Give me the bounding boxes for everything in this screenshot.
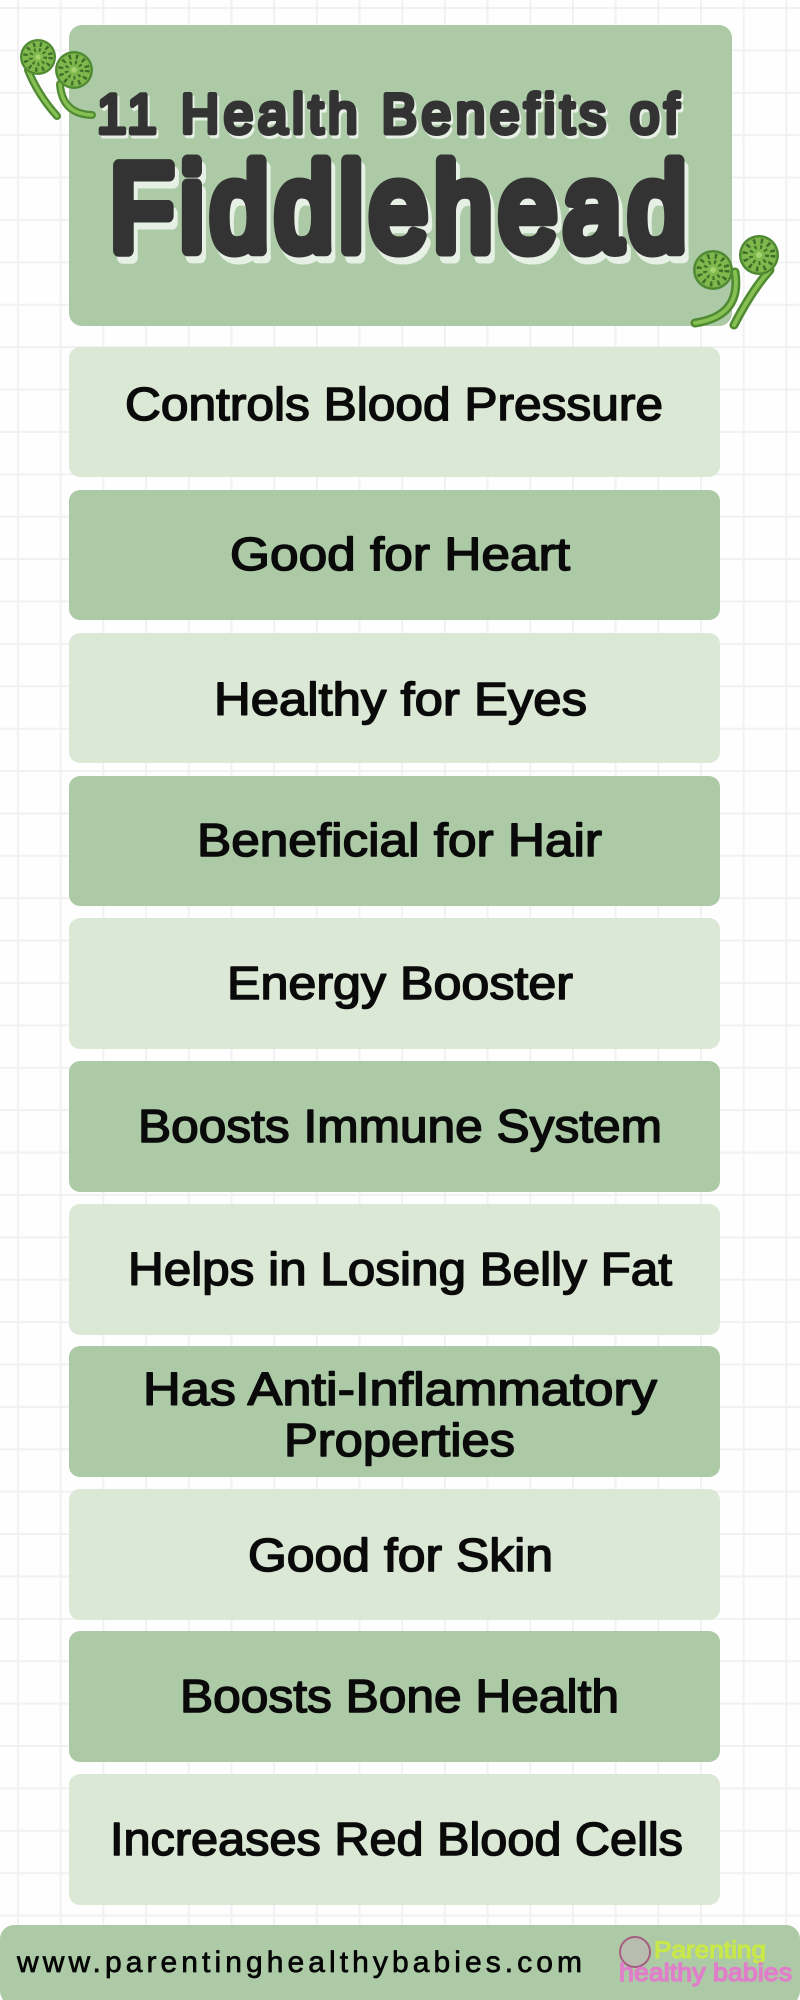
panel: Boosts Bone Health: [69, 1631, 720, 1762]
panel: Good for Skin: Good for Skin: [248, 1529, 553, 1581]
title: Fiddlehead: Fiddlehead: [110, 140, 686, 277]
logo: Parenting healthy babies: Parenting: [654, 1937, 766, 1964]
panel: Helps in Losing Belly Fat: [69, 1204, 720, 1335]
icon: fern quote right: [693, 235, 779, 325]
panel: Boosts Bone Health: Boosts Bone Health: [180, 1670, 619, 1722]
panel: Controls Blood Pressure: [69, 347, 720, 477]
panel: Energy Booster: Energy Booster: [227, 957, 573, 1009]
panel: Beneficial for Hair: [69, 776, 720, 906]
logo: Parenting healthy babies: [619, 1937, 792, 1987]
panel: Healthy for Eyes: Healthy for Eyes: [214, 673, 587, 725]
panel: Healthy for Eyes: [69, 633, 720, 763]
panel: Energy Booster: [69, 918, 720, 1049]
panel: Has Anti-Inflammatory Properties: Properties: [284, 1414, 515, 1466]
panel: Good for Heart: [69, 490, 720, 620]
title: 11 Health Benefits of: 11 Health Benefits of: [99, 86, 682, 148]
panel: Increases Red Blood Cells: [69, 1774, 720, 1905]
panel: Increases Red Blood Cells: Increases Red Blood Cells: [110, 1813, 683, 1865]
panel: Good for Skin: [69, 1489, 720, 1620]
panel: Boosts Immune System: Boosts Immune System: [138, 1100, 662, 1152]
icon: fern quote left: [20, 39, 93, 116]
panel: Boosts Immune System: [69, 1061, 720, 1192]
logo: Parenting healthy babies: healthy babies: [619, 1959, 792, 1987]
panel: Has Anti-Inflammatory Properties: Has Anti-Inflammatory: [143, 1363, 657, 1415]
panel: header: [69, 25, 732, 326]
panel: Good for Heart: Good for Heart: [230, 528, 570, 580]
panel: Beneficial for Hair: Beneficial for Hair: [197, 814, 602, 866]
panel: Has Anti-Inflammatory Properties: [69, 1346, 720, 1477]
panel: Controls Blood Pressure: Controls Blood Pressure: [125, 378, 663, 430]
title: 11 Health Benefits of: 11 Health Benefits of: [97, 83, 680, 145]
title: Fiddlehead: Fiddlehead: [114, 147, 690, 284]
panel: Helps in Losing Belly Fat: Helps in Losing Belly Fat: [128, 1243, 672, 1295]
website url: www.parentinghealthybabies.com: [16, 1946, 582, 1979]
panel: footer: [0, 1925, 800, 2000]
